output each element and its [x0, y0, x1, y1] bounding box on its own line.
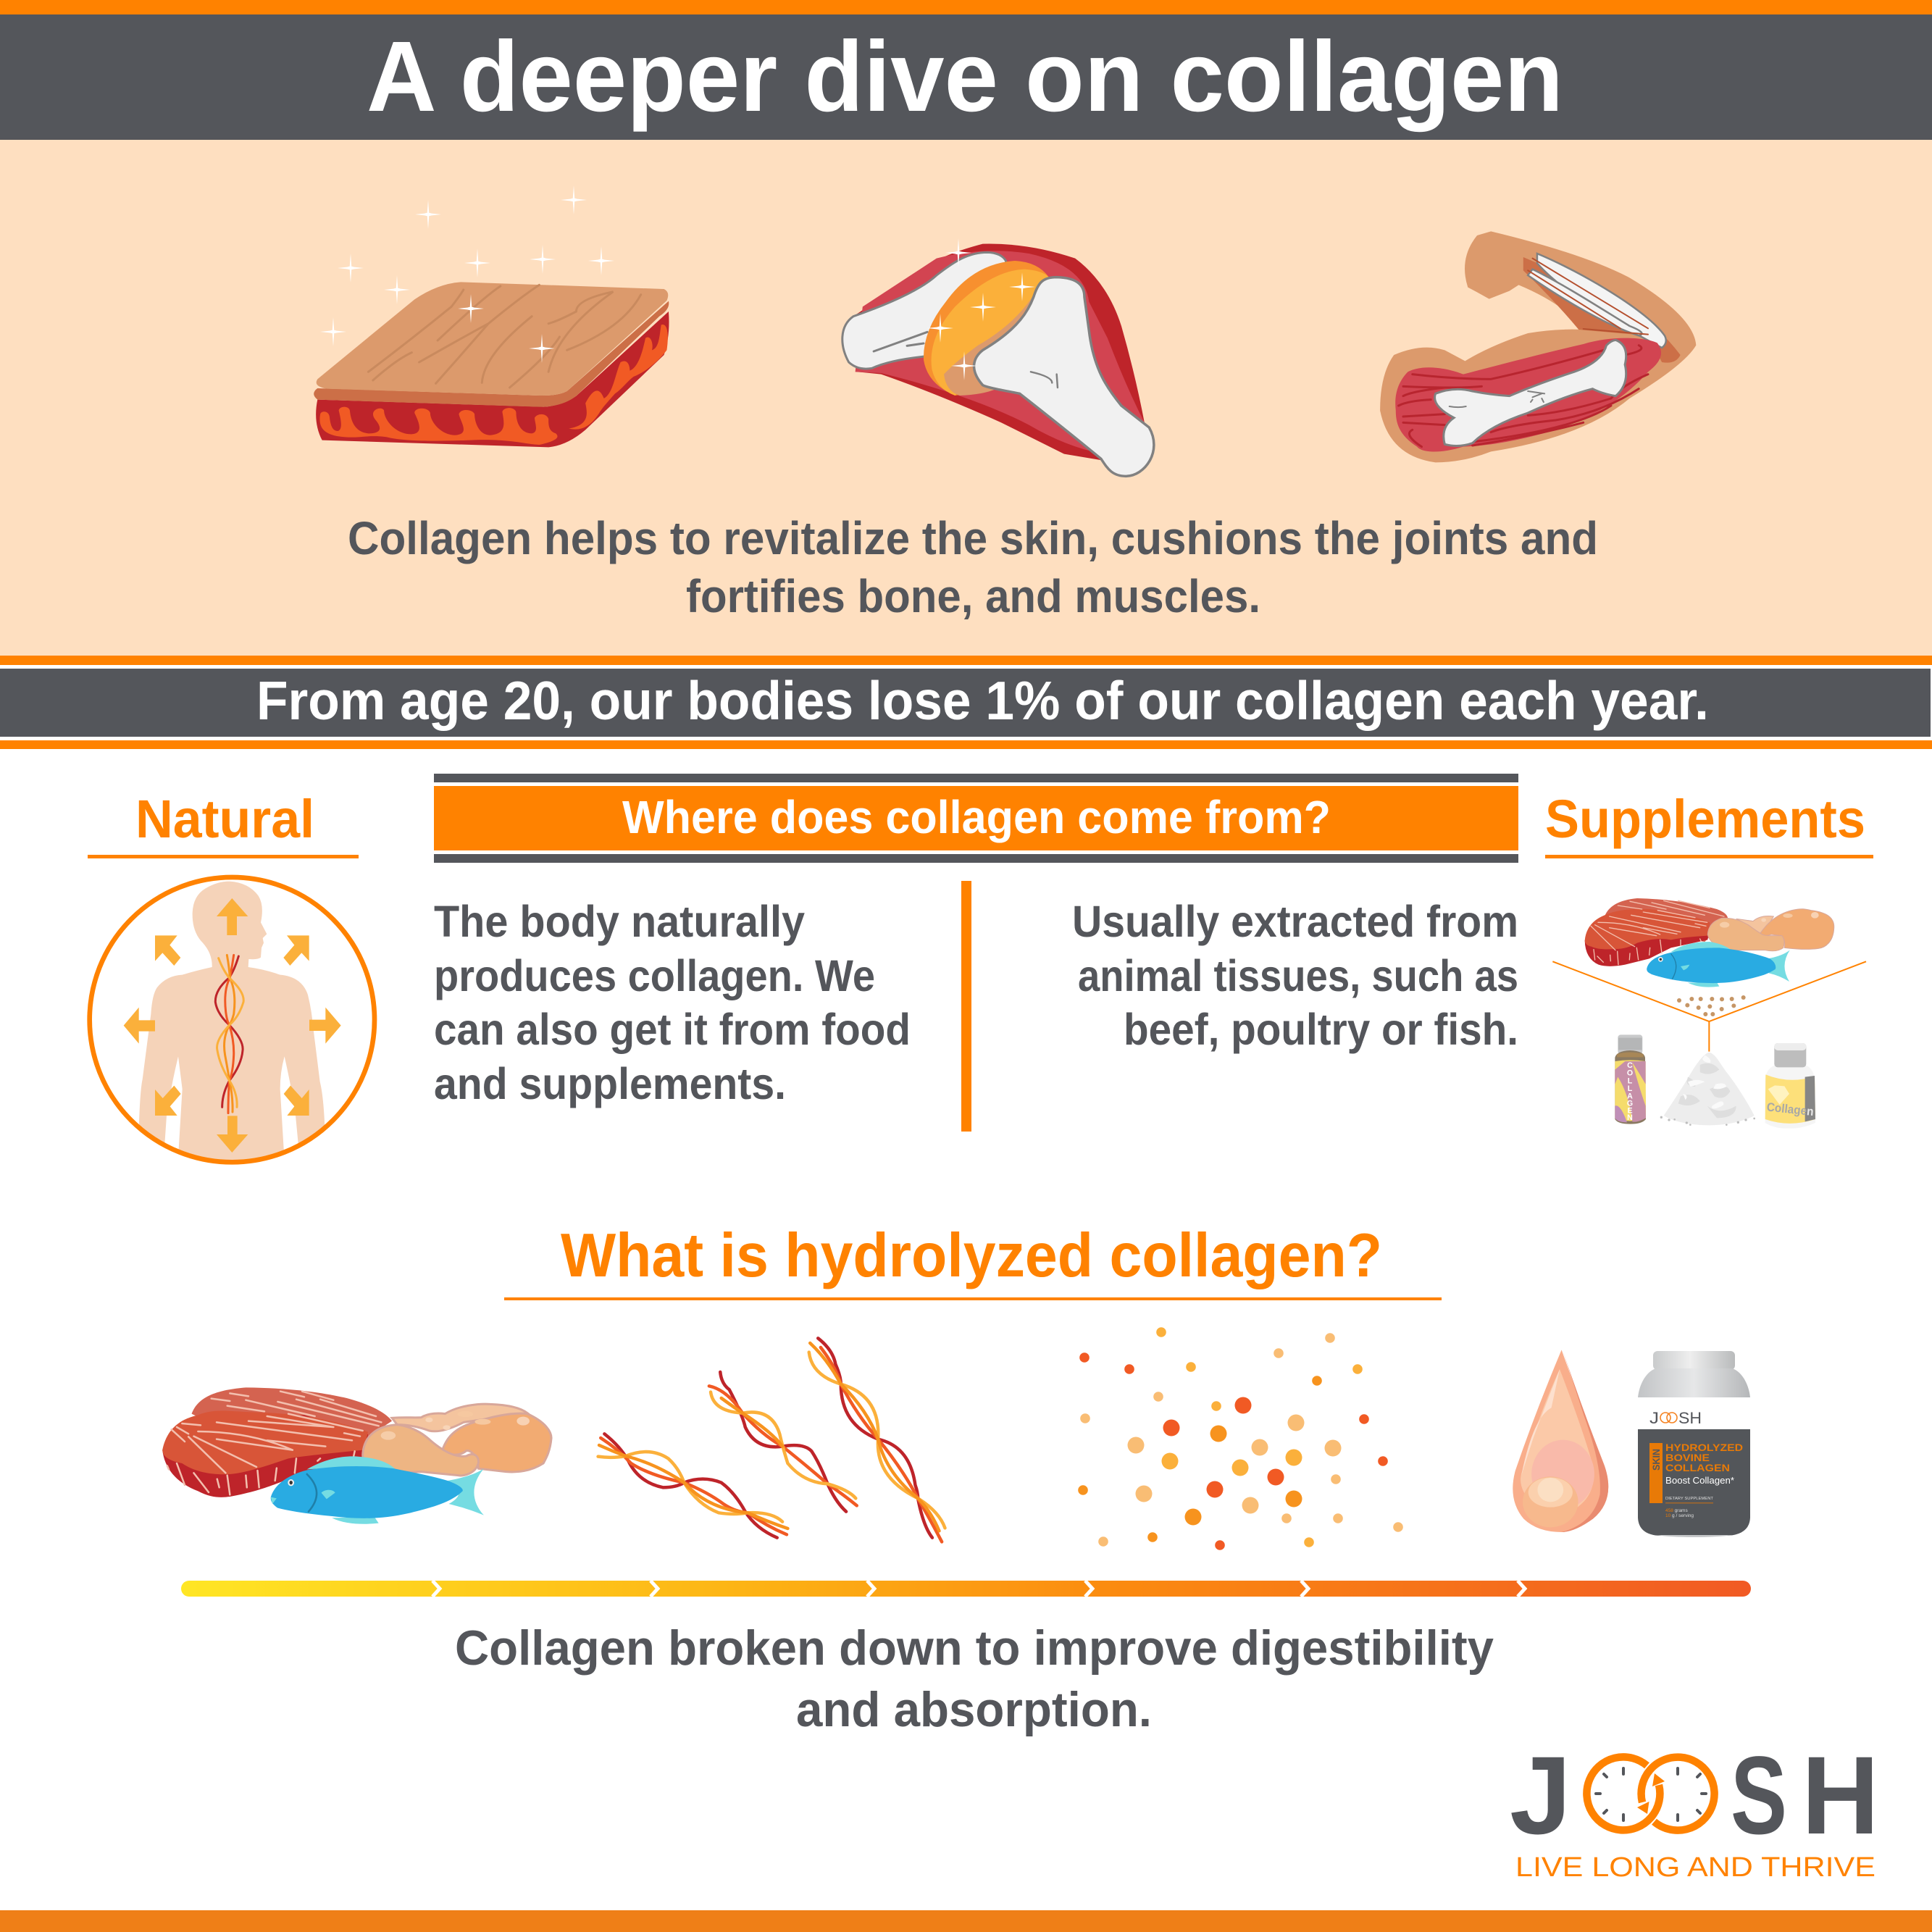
text: natural source: produces collagen. We — [434, 951, 875, 1000]
banner: 1% loss — [0, 656, 1932, 749]
text: benefits caption: fortifies bone, and muscles. — [686, 570, 1260, 622]
beef steak — [162, 1387, 392, 1497]
collagen jar — [1765, 1043, 1815, 1129]
helix 2 — [709, 1372, 857, 1512]
text: natural source — [434, 897, 911, 1108]
text: benefits caption: Collagen helps to revitalize the skin, cushions the joints and — [348, 512, 1598, 564]
text: supplement source: animal tissues, such as — [1078, 951, 1518, 1000]
arrows outward — [124, 898, 341, 1153]
text: supplement source — [1072, 897, 1518, 1054]
food sources — [1585, 898, 1834, 987]
collagen shot bottle: G — [1627, 1100, 1633, 1108]
progress arrow bar — [181, 1581, 1751, 1597]
heading bar: where does collagen come from: Where does collagen come from? — [622, 791, 1331, 843]
icon: meat chicken and fish — [162, 1387, 551, 1524]
collagen shot bottle: L — [1628, 1076, 1633, 1085]
heading: Supplements: Supplements — [1545, 789, 1865, 849]
helix 3 — [809, 1338, 945, 1542]
fish — [271, 1456, 484, 1524]
text: benefits caption — [348, 512, 1598, 622]
collagen shot bottle: E — [1627, 1107, 1633, 1116]
icon: Joosh collagen tub: BOVINE — [1665, 1452, 1710, 1463]
divider — [961, 881, 971, 1132]
heading bar: where does collagen come from — [434, 774, 1518, 863]
powder pile — [1660, 1053, 1755, 1126]
text: hydrolyzed caption — [455, 1621, 1494, 1737]
icon: Joosh collagen tub: 10 g / serving — [1665, 1513, 1694, 1518]
icon: skin block — [314, 282, 669, 447]
logo: Joosh — [1510, 1734, 1879, 1883]
panel: collagen benefits — [0, 140, 1932, 656]
logo: Joosh: S — [1731, 1734, 1787, 1857]
icon: Joosh collagen tub: COLLAGEN — [1665, 1462, 1730, 1473]
collagen shot bottle — [1615, 1034, 1646, 1124]
heading: Natural: Natural — [135, 789, 314, 849]
logo: Joosh: H — [1802, 1734, 1879, 1857]
text: hydrolyzed caption: Collagen broken down to improve digestibility — [455, 1621, 1494, 1676]
heading: Natural — [88, 789, 359, 858]
footer bar — [0, 1910, 1932, 1932]
icon: Joosh collagen tub: HYDROLYZED — [1665, 1442, 1743, 1453]
tub logo: J — [1649, 1409, 1659, 1427]
sparkles on skin — [320, 185, 614, 363]
tub logo: SH — [1678, 1409, 1702, 1427]
collagen shot bottle: L — [1628, 1084, 1633, 1093]
header band — [0, 0, 1932, 140]
text: natural source: can also get it from food — [434, 1005, 911, 1054]
text: supplement source: beef, poultry or fish. — [1124, 1005, 1518, 1054]
icon: Joosh collagen tub: DIETARY SUPPLEMENT — [1665, 1497, 1713, 1501]
icon: body producing collagen — [90, 877, 375, 1168]
body silhouette — [138, 882, 325, 1168]
chicken — [363, 1404, 551, 1476]
sparkles on joint — [927, 238, 1035, 380]
icon: Joosh collagen tub: SKIN — [1650, 1449, 1662, 1471]
collagen shot bottle: N — [1627, 1113, 1633, 1122]
collagen shot bottle: C — [1627, 1061, 1633, 1070]
banner: 1% loss: From age 20, our bodies lose 1% of our collagen each year. — [256, 670, 1709, 731]
icon: collagen peptide particles — [1078, 1327, 1403, 1550]
heading: What is hydrolyzed collagen: What is hydrolyzed collagen? — [561, 1221, 1382, 1290]
title: A deeper dive on collagen — [367, 21, 1563, 133]
logo clocks — [1586, 1757, 1715, 1831]
text: natural source: The body naturally — [434, 897, 805, 946]
collagen shot bottle: O — [1627, 1069, 1633, 1078]
text: natural source: and supplements. — [434, 1059, 786, 1108]
logo: Joosh: J — [1510, 1734, 1571, 1857]
text: hydrolyzed caption: and absorption. — [796, 1682, 1152, 1737]
funnel — [1552, 961, 1866, 1052]
icon: bone and muscle — [1380, 231, 1696, 462]
logo: Joosh: LIVE LONG AND THRIVE — [1515, 1852, 1875, 1883]
particles — [1677, 995, 1746, 1016]
icon: joint — [842, 238, 1154, 476]
collagen shot bottle: A — [1627, 1092, 1633, 1101]
icon: supplements funnel — [1552, 898, 1866, 1129]
icon: Joosh collagen tub: 458 grams — [1665, 1508, 1688, 1513]
helix 1 — [598, 1434, 787, 1538]
icon: Joosh collagen tub — [1638, 1351, 1750, 1537]
tub logo — [1649, 1409, 1702, 1427]
collagen jar: Collagen — [1766, 1100, 1815, 1118]
icon: collagen helices — [598, 1338, 945, 1542]
icon: collagen drop — [1513, 1350, 1608, 1532]
text: supplement source: Usually extracted from — [1072, 897, 1518, 946]
icon: Joosh collagen tub: Boost Collagen* — [1665, 1475, 1734, 1486]
collagen strands — [215, 955, 243, 1113]
